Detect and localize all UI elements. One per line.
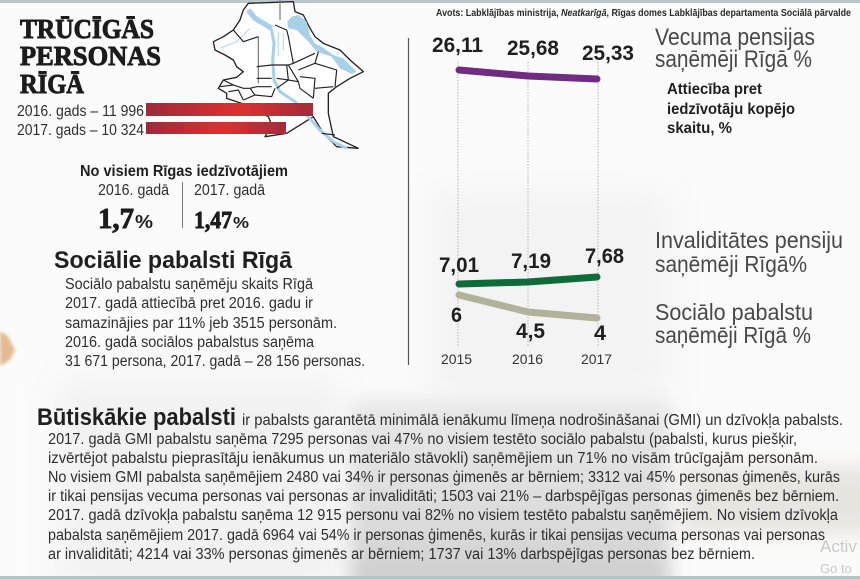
share of all Riga residents: No visiem Rīgas iedzīvotājiem <box>80 163 288 180</box>
share of all Riga residents: 2017. gadā <box>194 182 265 199</box>
share of all Riga residents: 1,47 <box>194 208 232 234</box>
axis years: 2017 <box>581 352 612 367</box>
series: old-age pension: 25,33 <box>582 42 634 65</box>
heading: social benefits: Sociālie pabalsti Rīgā <box>54 247 293 274</box>
text block: social benefits: 2016. gadā sociālos pabalstus saņēma <box>65 334 314 351</box>
series: disability pension <box>439 245 624 284</box>
text block: most important benefits: izvērtējot pabalstu pieprasītāju ienākumus un materiālo stāvokli) saņēmējiem un 71% no visām trūcīgajām personām. <box>48 450 818 467</box>
series: old-age pension: 25,68 <box>507 37 559 60</box>
series: social benefits <box>451 295 606 345</box>
title: RĪGĀ <box>20 69 84 99</box>
series: disability pension: 7,19 <box>511 250 551 273</box>
label: old-age pension recipients: saņēmēji Rīgā % <box>655 46 812 73</box>
share of all Riga residents: % <box>233 215 249 232</box>
label: disability pension recipients: saņēmēji Rīgā% <box>655 251 807 277</box>
text block: most important benefits: ir pabalsts garantētā minimālā ienākumu līmeņa nodrošināšanai (GMI) un dzīvokļa pabalsts. <box>242 412 843 429</box>
share of all Riga residents: 2016. gadā <box>98 182 169 199</box>
share of all Riga residents: % <box>135 212 153 232</box>
text block: social benefits: 2017. gadā attiecībā pret 2016. gadu ir <box>65 295 313 312</box>
label: old-age pension recipients <box>655 24 815 73</box>
label: social benefit recipients <box>655 299 813 348</box>
screen overlay watermark: Activ <box>820 537 857 556</box>
share of all Riga residents <box>80 163 288 235</box>
label: disability pension recipients: Invaliditātes pensiju <box>655 227 843 253</box>
label: disability pension recipients <box>655 227 843 277</box>
series: disability pension: 7,68 <box>585 245 624 268</box>
series: social benefits: 4 <box>594 322 606 345</box>
text block: social benefits: samazinājies par 11% jeb 3515 personām. <box>65 315 337 332</box>
map of Riga <box>213 0 363 148</box>
text block: social benefits <box>65 276 365 370</box>
series: social benefits: 4,5 <box>516 320 545 343</box>
title: TRŪCĪGĀS <box>20 14 154 44</box>
line chart <box>408 34 634 367</box>
icon: hand fragment at left edge <box>0 331 15 366</box>
share of all Riga residents: 1,7 <box>98 203 134 235</box>
bar chart: needy persons by year: 2016. gads – 11 996 <box>17 103 144 120</box>
series: disability pension: 7,01 <box>439 254 479 277</box>
title <box>20 14 161 99</box>
series: old-age pension: 26,11 <box>432 34 483 57</box>
note: ratio to population: Attiecība pret <box>667 81 762 98</box>
screen overlay watermark: Go to <box>820 561 852 576</box>
note: ratio to population <box>667 81 795 137</box>
bar chart: needy persons by year: 2017. gads – 10 324 <box>17 122 144 139</box>
note: ratio to population: iedzīvotāju kopējo <box>667 101 795 118</box>
text block: most important benefits: ar invaliditāti; 4214 vai 33% personas ģimenēs ar bērniem; 1737 vai 13% darbspējīgas personas bez bērniem. <box>48 546 755 563</box>
axis years: 2015 <box>441 352 472 367</box>
note: ratio to population: skaitu, % <box>667 120 732 137</box>
label: social benefit recipients: Sociālo pabalstu <box>655 299 813 325</box>
text block: most important benefits: Būtiskākie pabalsti <box>37 404 236 431</box>
text block: most important benefits: 2017. gadā GMI pabalstu saņēma 7295 personas vai 47% no visiem testēto sociālo pabalstu (pabalsti, kurus piešķir, <box>48 431 797 448</box>
series: old-age pension <box>432 34 634 79</box>
text block: social benefits: Sociālo pabalstu saņēmēju skaits Rīgā <box>65 276 313 293</box>
label: old-age pension recipients: Vecuma pensijas <box>655 24 815 51</box>
bar chart: needy persons by year <box>17 103 313 139</box>
axis years: 2016 <box>512 352 543 367</box>
text block: most important benefits <box>37 404 843 563</box>
axis years <box>441 352 612 367</box>
text block: social benefits: 31 671 persona, 2017. gadā – 28 156 personas. <box>65 353 365 370</box>
screen overlay watermark <box>820 537 857 576</box>
title: PERSONAS <box>20 41 161 71</box>
series: social benefits: 6 <box>451 304 462 327</box>
label: social benefit recipients: saņēmēji Rīgā % <box>655 322 811 348</box>
